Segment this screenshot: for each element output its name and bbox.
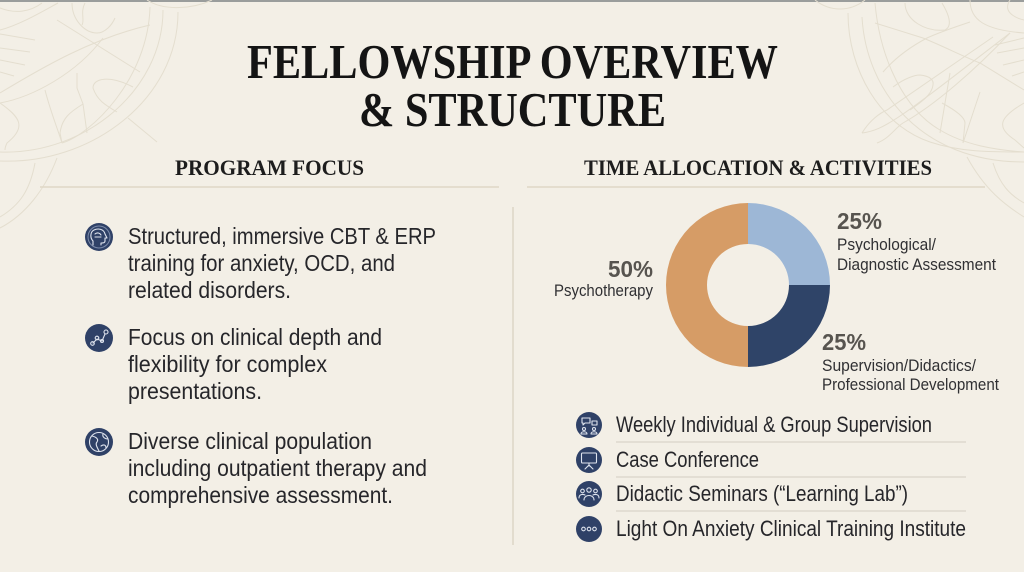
chart label: supervision: 25% (822, 329, 866, 355)
bullet: diverse population (85, 428, 427, 508)
icon: head with brain (85, 223, 113, 251)
chart label: assessment: 25% (837, 208, 882, 234)
chart label: assessment (837, 208, 996, 274)
bullet: clinical depth (85, 324, 382, 404)
chart label: supervision: Professional Development (822, 376, 999, 394)
decorative ornament: top left (0, 0, 212, 228)
chart label: assessment: Psychological/ (837, 236, 936, 254)
text block: comprehensive assessment. (128, 482, 393, 508)
chart label: psychotherapy: Psychotherapy (554, 282, 654, 300)
icon: supervision group (576, 412, 602, 438)
heading: time allocation: TIME ALLOCATION & ACTIVITIES (584, 155, 932, 180)
item: case conference: Case Conference (616, 447, 759, 472)
text block (128, 223, 436, 303)
chart label: psychotherapy (554, 256, 654, 300)
text block (128, 324, 382, 404)
text block: including outpatient therapy and (128, 455, 427, 481)
title: FELLOWSHIP OVERVIEW (247, 34, 778, 89)
activity list (576, 412, 966, 542)
panel: program focus (40, 155, 499, 508)
chart label: supervision (822, 329, 999, 394)
text block: Focus on clinical depth and (128, 324, 382, 350)
segment: supervision 25% (748, 285, 830, 367)
chart label: assessment: Diagnostic Assessment (837, 256, 996, 274)
segment: psychotherapy 50% (666, 203, 748, 367)
text block: Diverse clinical population (128, 428, 372, 454)
donut chart (666, 203, 830, 367)
item: case conference (576, 447, 759, 473)
chart label: psychotherapy: 50% (608, 256, 653, 282)
text block (128, 428, 427, 508)
icon: presentation board (576, 447, 602, 473)
text block: training for anxiety, OCD, and (128, 250, 395, 276)
text block: presentations. (128, 378, 262, 404)
segment: assessment 25% (748, 203, 830, 285)
item: didactic seminars: Didactic Seminars (“Learning Lab”) (616, 481, 908, 506)
panel: time allocation and activities (527, 155, 999, 542)
title (247, 34, 778, 137)
title: & STRUCTURE (359, 82, 666, 137)
icon: globe (85, 428, 113, 456)
heading: program focus: PROGRAM FOCUS (175, 155, 364, 180)
text block: flexibility for complex (128, 351, 327, 377)
decorative ornament: top right (815, 0, 1024, 217)
item: training institute: Light On Anxiety Clinical Training Institute (616, 516, 966, 541)
icon: people (576, 481, 602, 507)
bullet: CBT and ERP training (85, 223, 436, 303)
text block: Structured, immersive CBT & ERP (128, 223, 436, 249)
item: supervision: Weekly Individual & Group Supervision (616, 412, 932, 437)
text block: related disorders. (128, 277, 291, 303)
icon: three dots (576, 516, 602, 542)
chart label: supervision: Supervision/Didactics/ (822, 357, 976, 375)
icon: connected nodes (85, 324, 113, 352)
